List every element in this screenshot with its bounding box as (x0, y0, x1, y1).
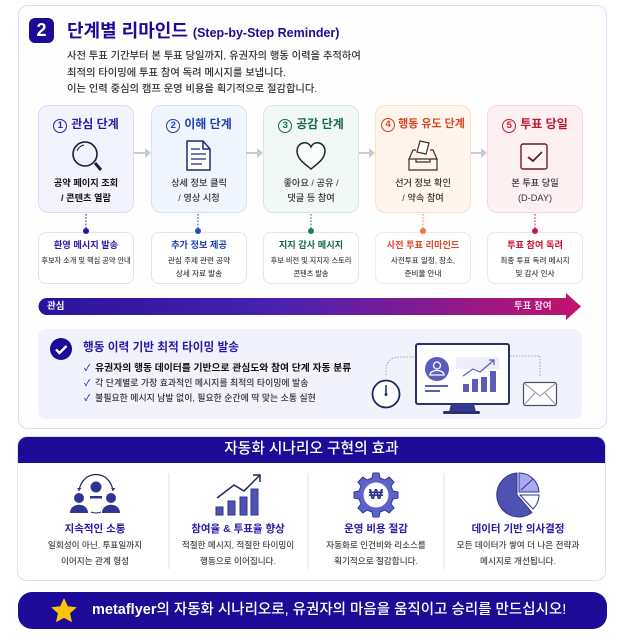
sub card 1 (38, 232, 134, 284)
step card 1: interest: 관심 단계 (71, 117, 119, 131)
arrows between cards (134, 148, 487, 158)
effect 1 description: 이어지는 관계 형성 (61, 556, 129, 566)
step card 1: interest: 공약 페이지 조회 (54, 178, 118, 188)
sub card 1: 환영 메시지 발송 (54, 240, 118, 250)
section heading: 단계별 리마인드 (Step-by-Step Reminder) (67, 21, 339, 41)
panel: step-by-step reminder (18, 5, 607, 429)
icon: growth chart (216, 475, 260, 515)
effect 2 description (182, 540, 294, 566)
sub card 4: 준비물 안내 (404, 268, 442, 278)
step card 5: voting day: 5 (507, 120, 512, 131)
step card 5: voting day: 본 투표 당일 (511, 178, 559, 188)
effect 1 description: 일회성이 아닌, 투표일까지 (48, 540, 142, 550)
arrow start label: 관심 (47, 301, 64, 312)
sub card 3 (263, 232, 359, 284)
step card 4: action: 4 (385, 119, 391, 130)
sub card 2: 관심 주제 관련 공약 (168, 256, 230, 265)
icon: check circle (50, 338, 72, 360)
step card 2: understanding: 이해 단계 (184, 117, 232, 131)
timing checklist: ✓ 각 단계별로 가장 효과적인 메시지를 최적의 타이밍에 발송 (84, 378, 308, 388)
icon: magnifier (73, 142, 101, 170)
step card 3: empathy: 3 (283, 120, 288, 131)
effects heading (17, 436, 606, 463)
step number badge: 2 (36, 20, 46, 40)
dotted flow lines (386, 356, 540, 376)
step number badge (29, 18, 54, 43)
icon: document (187, 141, 210, 170)
step card 1: interest (38, 105, 134, 213)
icon: people in a loop (70, 474, 120, 513)
effect 1 title: 지속적인 소통 (65, 523, 125, 535)
icon: ballot box (409, 141, 437, 170)
effect 4 description (457, 540, 579, 566)
sub card 2 (151, 232, 247, 284)
step card 3: empathy: 공감 단계 (296, 117, 344, 131)
timing checklist: ✓ 불필요한 메시지 남발 없이, 필요한 순간에 딱 맞는 소통 실현 (84, 393, 316, 403)
sub card 3: 후보 비전 및 지지자 스토리 (271, 256, 351, 265)
arrow end label: 투표 참여 (514, 301, 552, 312)
effect 4 title: 데이터 기반 의사결정 (472, 523, 564, 535)
icon: pie chart (497, 473, 539, 517)
sub card 5: 최종 투표 독려 메시지 (500, 256, 570, 265)
intro text: 최적의 타이밍에 투표 참여 독려 메시지를 보냅니다. (67, 68, 286, 78)
step card 4: action: 행동 유도 단계 (398, 118, 465, 130)
intro text: 사전 투표 기간부터 본 투표 당일까지, 유권자의 행동 이력을 추적하여 (67, 51, 361, 62)
effect 2 description: 적절한 메시지, 적절한 타이밍이 (182, 540, 294, 550)
sub card 5: 투표 참여 독려 (507, 240, 563, 250)
effect 3 description (326, 540, 426, 566)
step card 2: understanding: 상세 정보 클릭 (171, 178, 227, 188)
sub card 2: 상세 자료 발송 (176, 268, 222, 278)
step card 4: action: / 약속 참여 (402, 192, 444, 202)
step card 5: voting day (487, 105, 583, 213)
step card 1: interest: / 콘텐츠 열람 (61, 192, 111, 202)
timing heading: 행동 이력 기반 최적 타이밍 발송 (83, 341, 239, 354)
step card 3: empathy: 좋아요 / 공유 / (283, 178, 339, 188)
clock (372, 380, 400, 408)
sub card 3: 지지 감사 메시지 (279, 240, 343, 250)
panel: automation effects (17, 436, 606, 581)
effect 4 description: 메시지로 개선됩니다. (480, 556, 556, 566)
sub card 2: 추가 정보 제공 (171, 240, 227, 250)
effect 3 description: 자동화로 인건비와 리소스를 (326, 540, 426, 550)
intro text: 이는 인력 중심의 캠프 운영 비용을 획기적으로 절감합니다. (67, 84, 317, 95)
effect 1 description (48, 540, 142, 566)
icon: star (51, 598, 77, 622)
envelope (524, 382, 556, 406)
dotted connectors (86, 214, 535, 228)
effect 2 description: 행동으로 이어집니다. (200, 556, 276, 566)
step card 2: understanding (151, 105, 247, 213)
sub card 1: 후보자 소개 및 핵심 공약 안내 (41, 256, 131, 265)
footer message: metaflyer의 자동화 시나리오로, 유권자의 마음을 움직이고 승리를 만드십시오! (92, 602, 566, 618)
step card 2: understanding: 2 (171, 120, 176, 131)
sub card 3: 콘텐츠 발송 (293, 268, 329, 278)
sub card 4: 사전투표 일정, 장소, (391, 256, 455, 265)
sub card 4: 사전 투표 리마인드 (387, 240, 459, 250)
won sign: ₩ (369, 486, 383, 503)
icon: heart (297, 143, 325, 169)
icon: checkbox (521, 144, 547, 169)
effect 4 description: 모든 데이터가 쌓여 더 나은 전략과 (457, 540, 579, 550)
timing checklist: ✓ 유권자의 행동 데이터를 기반으로 관심도와 참여 단계 자동 분류 (84, 363, 351, 374)
footer banner (18, 592, 607, 629)
intro text (67, 50, 361, 95)
icon: gear with won sign (354, 473, 398, 517)
sub card 5 (487, 232, 583, 284)
effect 2 title: 참여율 & 투표율 향상 (191, 523, 285, 535)
step card 5: voting day: 투표 당일 (520, 117, 568, 131)
effect 3 title: 운영 비용 절감 (344, 523, 408, 535)
sub card 4 (375, 232, 471, 284)
step card 1: interest: 1 (58, 120, 63, 131)
step card 5: voting day: (D-DAY) (518, 192, 552, 202)
step card 4: action: 선거 정보 확인 (395, 178, 451, 188)
panel: behaviour-based timing (38, 329, 582, 419)
timing checklist (84, 362, 351, 403)
sub card 5: 및 감사 인사 (515, 268, 555, 278)
effect 3 description: 획기적으로 절감합니다. (334, 556, 418, 566)
step card 3: empathy (263, 105, 359, 213)
step card 4: action (375, 105, 471, 213)
effects heading: 자동화 시나리오 구현의 효과 (224, 441, 399, 457)
step card 3: empathy: 댓글 등 참여 (287, 192, 335, 202)
step card 2: understanding: / 영상 시청 (178, 192, 220, 202)
monitor (416, 344, 509, 414)
